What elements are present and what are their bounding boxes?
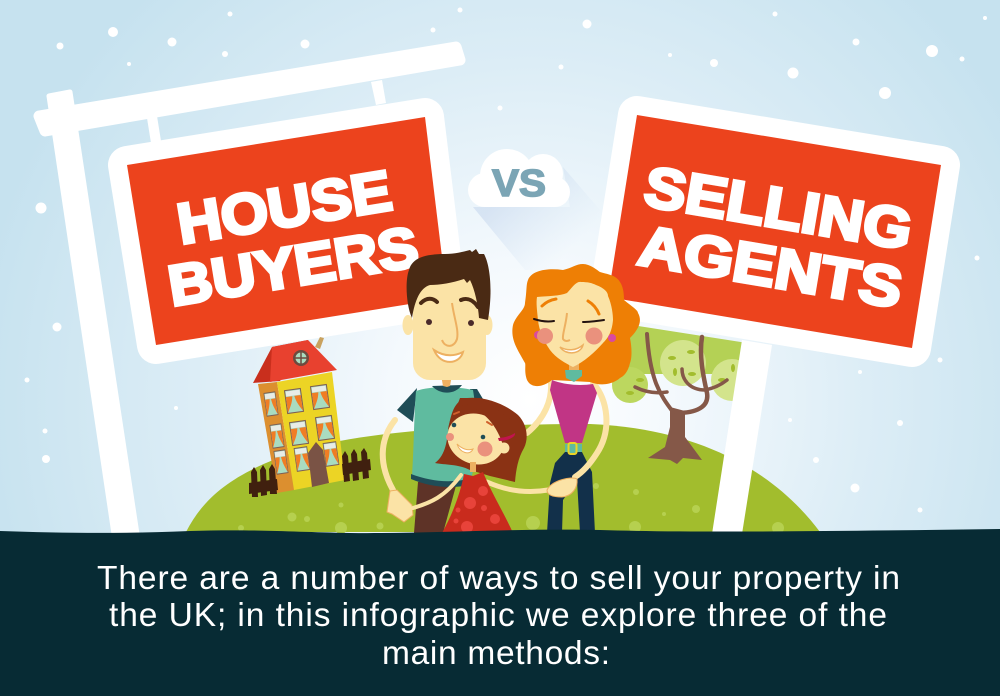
nose [442, 303, 457, 346]
belt [565, 444, 582, 452]
face [413, 275, 486, 380]
snow dots [24, 8, 987, 512]
branches [635, 334, 727, 413]
left sign post [39, 47, 460, 534]
face [537, 282, 613, 367]
fringe [448, 398, 512, 445]
intro text: There are a number of ways to sell your property in [97, 560, 900, 597]
girl [413, 398, 548, 533]
top [550, 380, 597, 443]
fence right [342, 448, 371, 482]
heading: buyers: BUYERS [164, 215, 423, 319]
hill [186, 424, 820, 534]
arm [383, 420, 395, 490]
arms [413, 475, 461, 508]
eyebrows [454, 412, 492, 425]
pants [414, 482, 457, 533]
man [383, 249, 492, 533]
tree [612, 325, 753, 464]
ears [402, 315, 414, 335]
vs label: VS [492, 163, 546, 205]
heading: selling: SELLING [640, 155, 917, 262]
smile [560, 345, 583, 353]
dark footer band [0, 529, 1000, 696]
cheek [478, 442, 492, 456]
nose [563, 313, 570, 341]
intro text [97, 560, 900, 672]
dress [442, 472, 513, 533]
vs cloud [468, 149, 600, 270]
left sign: House Buyers [127, 117, 447, 345]
smile [457, 444, 473, 453]
eyes [452, 423, 456, 427]
intro text: the UK; in this infographic we explore three of the [109, 597, 887, 634]
t-shirt [412, 387, 476, 484]
eyes [426, 319, 432, 325]
right sign: Selling Agents [608, 115, 941, 348]
face [440, 406, 512, 472]
pants [547, 452, 595, 533]
heading: agents: AGENTS [634, 214, 907, 321]
trunk [648, 407, 702, 464]
cheeks [534, 331, 542, 339]
right sign post [712, 340, 772, 534]
hair [435, 398, 527, 482]
joined hands [547, 478, 577, 497]
woman [512, 264, 640, 533]
heading: house: HOUSE [173, 159, 396, 257]
house [249, 337, 371, 497]
intro text: main methods: [382, 635, 610, 672]
hair [407, 249, 491, 320]
smile [434, 350, 463, 362]
ear [498, 442, 510, 454]
neck [470, 462, 476, 472]
hair clip [498, 433, 515, 441]
eyebrows [542, 299, 599, 314]
eyes [534, 319, 604, 322]
eyebrows [421, 299, 478, 307]
fence left [249, 464, 278, 497]
hair [512, 264, 640, 386]
sleeves [397, 388, 417, 422]
necklace [569, 362, 579, 372]
hand [387, 490, 413, 522]
arms [575, 383, 606, 477]
